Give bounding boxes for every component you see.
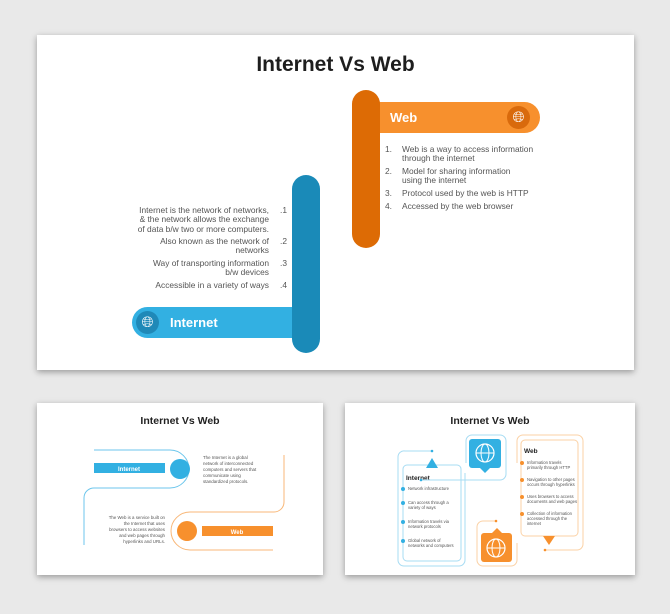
web box: Collection of information — [527, 511, 573, 516]
web text: The Web is a service built on — [109, 515, 166, 520]
web box: primarily through HTTP — [527, 465, 570, 470]
internet list: .2 — [280, 236, 287, 246]
web box: Information travels — [527, 460, 561, 465]
web list: using the internet — [402, 175, 466, 185]
internet box: Network infrastructure — [408, 486, 450, 491]
internet text: computers and servers that — [203, 467, 257, 472]
internet box: variety of ways — [408, 505, 436, 510]
web list: 4. — [385, 201, 392, 211]
internet list: networks — [235, 245, 269, 255]
internet box — [401, 458, 461, 561]
internet list: .4 — [280, 280, 287, 290]
web box: Uses browsers to access — [527, 494, 574, 499]
orange vertical bar — [352, 90, 380, 248]
internet text: standardized protocols. — [203, 479, 248, 484]
icon: web circle — [177, 521, 197, 541]
panel: bottom-right slide — [345, 403, 635, 575]
internet box: Information travels via — [408, 519, 450, 524]
web box: Navigation to other pages — [527, 477, 575, 482]
web list: Protocol used by the web is HTTP — [402, 188, 529, 198]
internet pill — [132, 307, 307, 338]
internet list: Way of transporting information — [153, 258, 269, 268]
web list: 3. — [385, 188, 392, 198]
internet list: Accessible in a variety of ways — [155, 280, 269, 290]
web box: occurs through hyperlinks — [527, 482, 575, 487]
internet list: .3 — [280, 258, 287, 268]
web text: browsers to access websites — [109, 527, 166, 532]
internet list: Also known as the network of — [160, 236, 269, 246]
internet box: network protocols — [408, 524, 441, 529]
internet box: Can access through a — [408, 500, 449, 505]
internet box: networks and computers — [408, 543, 454, 548]
web list: Model for sharing information — [402, 166, 510, 176]
web box: accessed through the — [527, 516, 568, 521]
icon: internet globe — [136, 311, 159, 334]
internet list: b/w devices — [225, 267, 269, 277]
internet bar: Internet — [118, 467, 140, 473]
icon: web globe: 🌐︎ — [512, 109, 524, 126]
web text: and web pages through — [119, 533, 166, 538]
web list: 2. — [385, 166, 392, 176]
web bar: Web — [231, 530, 244, 536]
panel: bottom-left slide — [37, 403, 323, 575]
internet box: Internet — [406, 475, 431, 482]
internet text: The Internet is a global — [203, 455, 248, 460]
web list: Web is a way to access information — [402, 144, 533, 154]
internet text: communicate using — [203, 473, 241, 478]
icon: internet box globe — [469, 439, 501, 473]
blue vertical bar — [292, 175, 320, 353]
web list — [385, 144, 533, 211]
panel: main slide — [37, 35, 634, 370]
icon: web globe — [507, 106, 530, 129]
web list: Accessed by the web browser — [402, 201, 513, 211]
internet box: Global network of — [408, 538, 441, 543]
web box: internet — [527, 521, 542, 526]
web text: hyperlinks and URLs. — [123, 539, 165, 544]
internet list: .1 — [280, 205, 287, 215]
web text: the Internet that uses — [124, 521, 166, 526]
web pill — [367, 102, 540, 133]
title: Internet Vs Web — [256, 53, 415, 76]
web label: Web — [390, 110, 417, 125]
web box: documents and web pages — [527, 499, 577, 504]
title: Internet Vs Web — [140, 415, 220, 427]
icon: internet circle — [170, 459, 190, 479]
web box — [520, 440, 578, 545]
internet list: & the network allows the exchange — [140, 214, 269, 224]
internet list: Internet is the network of networks, — [139, 205, 269, 215]
web bar — [202, 526, 273, 536]
internet bar — [94, 463, 165, 473]
web list: through the internet — [402, 153, 475, 163]
icon: web box globe — [481, 528, 512, 562]
title: Internet Vs Web — [450, 415, 530, 427]
web list: 1. — [385, 144, 392, 154]
internet list — [138, 205, 287, 290]
internet list: of data b/w two or more computers. — [138, 224, 269, 234]
web box: Web — [524, 448, 538, 455]
internet label: Internet — [170, 315, 218, 330]
internet text: network of interconnected — [203, 461, 254, 466]
icon: internet globe: 🌐︎ — [141, 314, 154, 331]
